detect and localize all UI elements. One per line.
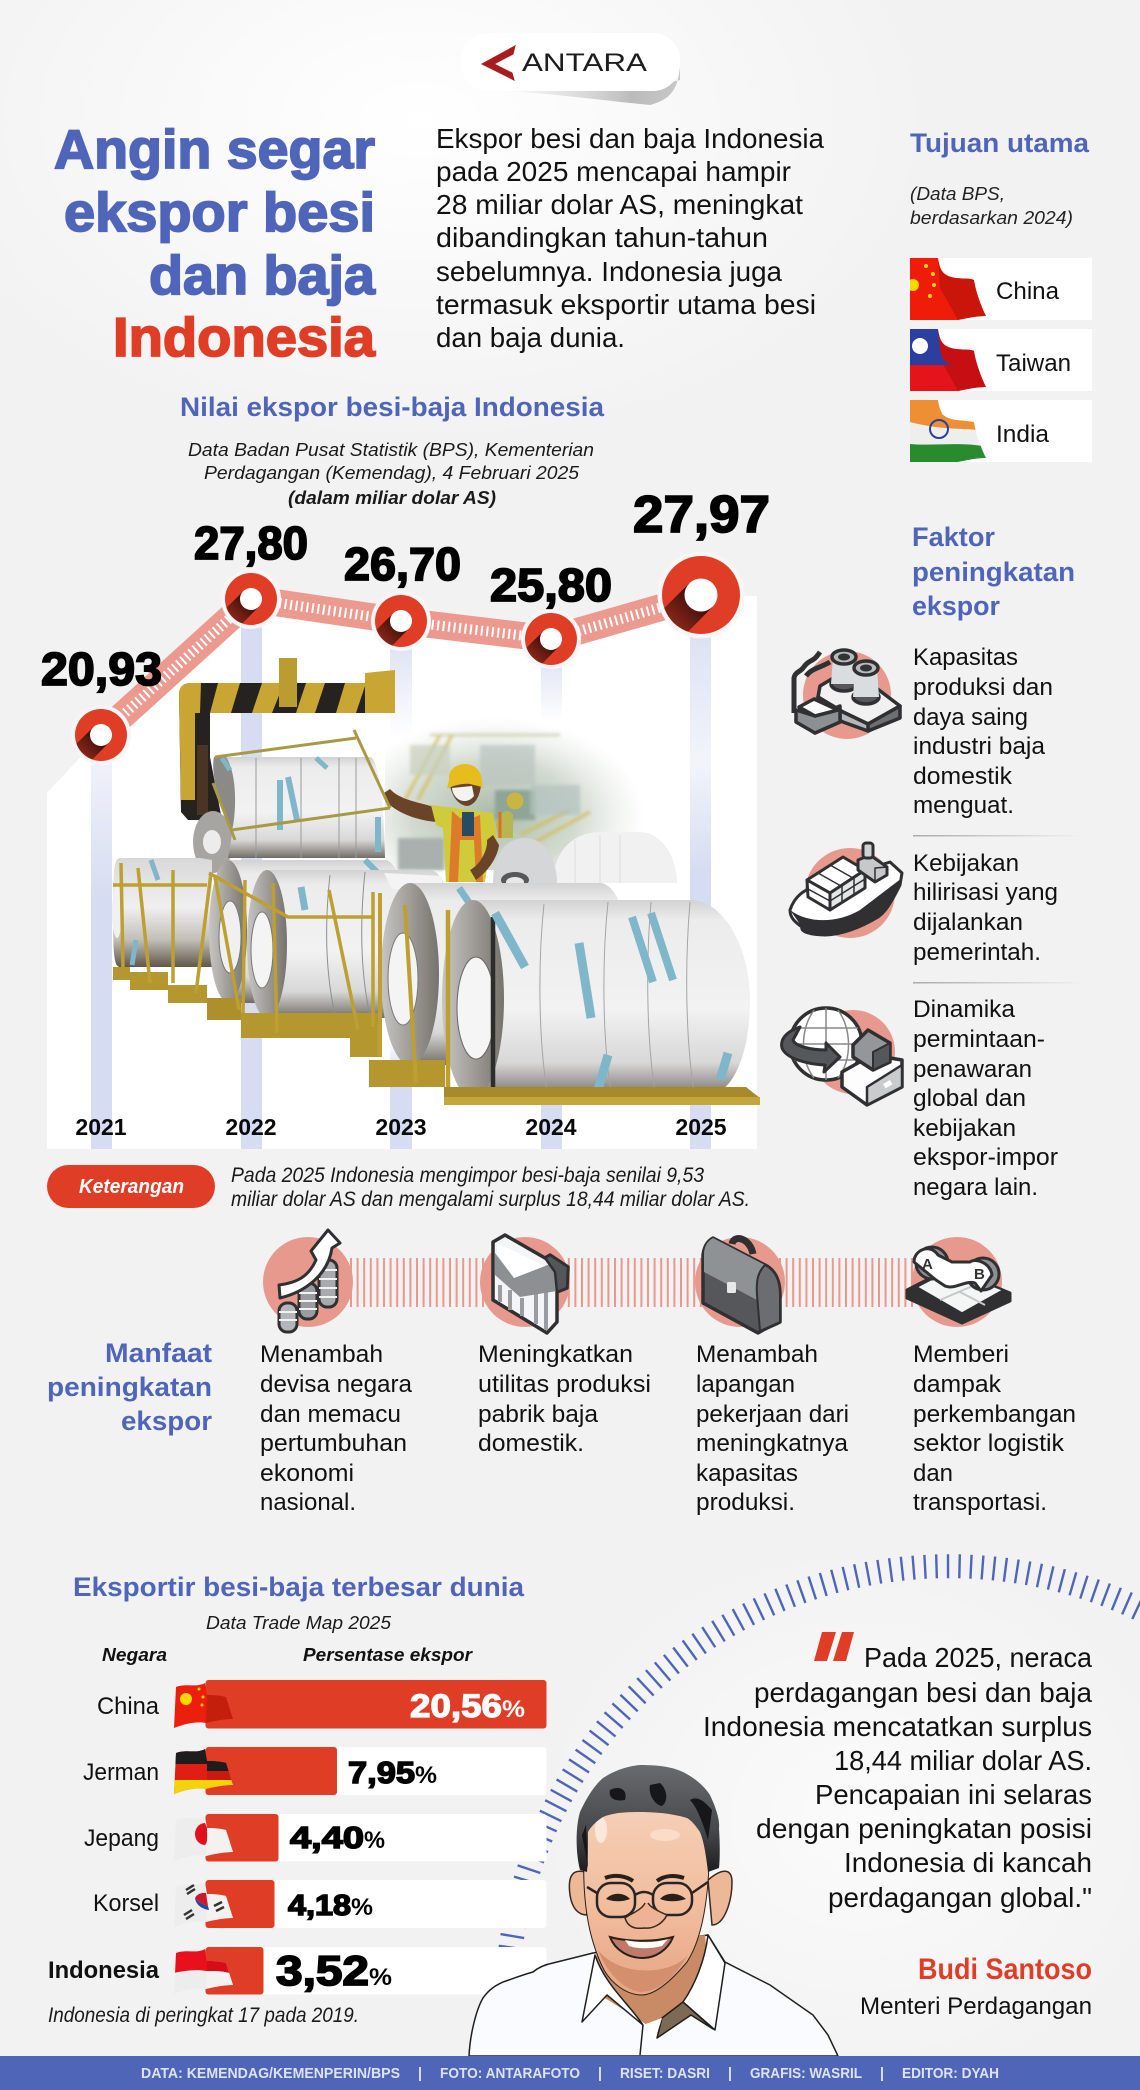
text: factor 3: global dan (913, 1085, 1026, 1112)
worker (384, 764, 499, 882)
quote text (703, 1642, 1093, 1913)
note: Keterangan: miliar dolar AS dan mengalami surplus 18,44 miliar dolar AS. (231, 1188, 750, 1211)
text: benefit 1: ekonomi (260, 1460, 354, 1487)
row: Indonesia: 3,52 (276, 1947, 369, 1994)
row: Korsel: Korsel (93, 1890, 159, 1917)
photo: steel coils and worker (112, 658, 760, 1105)
intro paragraph: dibandingkan tahun-tahun (436, 222, 768, 253)
text: factor 3: ekspor-impor (913, 1144, 1058, 1171)
text: benefit 4: perkembangan (913, 1401, 1076, 1428)
text: factor 1: industri baja (913, 733, 1046, 760)
factory background (385, 700, 645, 870)
connecting line (101, 596, 701, 735)
icon: coins and arrow (263, 1230, 353, 1332)
heading: Faktor peningkatan ekspor: peningkatan (912, 557, 1075, 587)
left coil (112, 858, 212, 1003)
text: benefit 4: transportasi. (913, 1489, 1047, 1516)
source note: Data Trade Map 2025 (206, 1613, 392, 1633)
point 2024 (521, 613, 581, 669)
source note: berdasarkan 2024) (910, 208, 1073, 228)
second coil (350, 883, 634, 1087)
data values (41, 486, 770, 695)
year labels: 2022 (225, 1114, 277, 1140)
text: factor 3 (913, 996, 1058, 1201)
intro paragraph: dan baja dunia. (436, 322, 625, 353)
row: Indonesia: Indonesia (48, 1957, 160, 1984)
lifter hook (179, 658, 395, 820)
row: Jepang: 4,40 (290, 1820, 364, 1855)
front coil (442, 900, 760, 1105)
heading: chart title: Nilai ekspor besi-baja Indonesia (180, 392, 605, 422)
data points (64, 552, 744, 772)
background coils (493, 832, 677, 888)
white chart background (47, 596, 757, 1149)
quote text: Pada 2025, neraca (864, 1642, 1093, 1673)
card: China: China (996, 278, 1060, 305)
heading: Faktor peningkatan ekspor: ekspor (912, 591, 1000, 621)
point 2025 (658, 556, 744, 638)
title: Indonesia (113, 306, 375, 368)
text: benefit 3: Menambah (696, 1341, 818, 1368)
quote text: dengan peningkatan posisi (756, 1813, 1092, 1844)
icon: map route: B (974, 1266, 985, 1283)
icon: map route: A (922, 1256, 933, 1273)
row: Korsel: % (351, 1894, 373, 1921)
row: Jerman: 7,95 (348, 1755, 415, 1790)
point 2021 (75, 707, 131, 763)
quote text: perdagangan global." (828, 1882, 1092, 1913)
footer credits: EDITOR: DYAH (902, 2065, 999, 2082)
text: benefit 3: lapangan (696, 1371, 795, 1398)
row: China: China (97, 1693, 160, 1720)
footer credits: | (598, 2065, 602, 2082)
speaker title: Menteri Perdagangan (860, 1993, 1092, 2020)
portrait: Budi Santoso (469, 1765, 838, 2056)
chart source note (188, 440, 594, 508)
text: factor 1: Kapasitas (913, 644, 1018, 671)
middle coil (209, 870, 455, 1038)
text: factor 1: domestik (913, 763, 1013, 790)
text: benefit 4 (913, 1341, 1076, 1516)
row: Jerman (83, 1747, 546, 1795)
text: factor 2: Kebijakan (913, 850, 1019, 877)
icon: factory utilization (480, 1235, 570, 1333)
text: benefit 3: kapasitas (696, 1460, 798, 1487)
data values: 26,70 (344, 538, 461, 590)
intro paragraph: Ekspor besi dan baja Indonesia (436, 123, 825, 154)
text: benefit 2: Meningkatkan (478, 1341, 633, 1368)
text: factor 3: penawaran (913, 1056, 1032, 1083)
row: Jepang (84, 1814, 546, 1862)
text: benefit 3: produksi. (696, 1489, 795, 1516)
data values: 27,97 (633, 486, 770, 544)
quote text: Indonesia mencatatkan surplus (703, 1711, 1092, 1742)
text: benefit 1: dan memacu (260, 1401, 401, 1428)
text: benefit 4: sektor logistik (913, 1430, 1065, 1457)
quote text: perdagangan besi dan baja (754, 1677, 1093, 1708)
text: benefit 1: Menambah (260, 1341, 383, 1368)
quote text: Pencapaian ini selaras (815, 1779, 1092, 1810)
footer credits: GRAFIS: WASRIL (750, 2065, 862, 2082)
icon: map route (907, 1237, 1010, 1327)
logo: ANTARA (461, 33, 680, 105)
glasses (587, 1882, 708, 1917)
text: benefit 1: devisa negara (260, 1371, 413, 1398)
footer credits (0, 2056, 1140, 2090)
heading: Manfaat peningkatan ekspor (47, 1338, 213, 1436)
panel: export benefits (47, 1230, 1076, 1516)
panel: main destinations (907, 128, 1092, 462)
intro paragraph: termasuk eksportir utama besi (436, 289, 816, 320)
row: Indonesia: % (369, 1964, 392, 1991)
title: dan baja (149, 244, 375, 306)
text: benefit 2: pabrik baja (478, 1401, 599, 1428)
face (584, 1808, 709, 1995)
text: factor 1: daya saing (913, 704, 1028, 731)
panel: world exporters bar chart (48, 1572, 546, 2027)
text: benefit 2: utilitas produksi (478, 1371, 651, 1398)
column headers (102, 1645, 473, 1665)
neck (596, 1935, 712, 2035)
text: factor 2 (913, 850, 1058, 966)
row: Jerman: Jerman (83, 1759, 159, 1786)
row: China (97, 1680, 546, 1729)
card: Taiwan (910, 329, 1092, 391)
data values: 20,93 (41, 643, 162, 695)
year labels: 2025 (675, 1114, 727, 1140)
quote (703, 1632, 1093, 2020)
year labels: 2024 (525, 1114, 577, 1140)
row: China: % (502, 1696, 525, 1723)
top coil (193, 730, 390, 873)
note: Keterangan: Keterangan (79, 1176, 184, 1198)
text: benefit 4: dampak (913, 1371, 1002, 1398)
card: India: India (996, 421, 1050, 448)
icon: globe and box (782, 1008, 902, 1105)
heading: Manfaat peningkatan ekspor: ekspor (121, 1406, 213, 1436)
background worker (496, 792, 524, 838)
text: benefit 2: domestik. (478, 1430, 584, 1457)
footer credits: | (418, 2065, 422, 2082)
rear middle coil (196, 860, 408, 1020)
icon: factory (794, 650, 900, 739)
row: Korsel: 4,18 (288, 1890, 351, 1922)
text: benefit 3: pekerjaan dari (696, 1401, 849, 1428)
heading: world exporters: Eksportir besi-baja terbesar dunia (73, 1572, 525, 1602)
eyebrows and eyes (605, 1876, 684, 1881)
text: factor 2: pemerintah. (913, 939, 1041, 966)
hair (577, 1765, 720, 1872)
intro paragraph: sebelumnya. Indonesia juga (436, 256, 783, 287)
column headers: Negara (102, 1645, 167, 1665)
source note (910, 184, 1073, 228)
title (54, 118, 375, 368)
text: benefit 4: dan (913, 1460, 953, 1487)
row: Korsel (93, 1880, 546, 1928)
chart source note: Data Badan Pusat Statistik (BPS), Kementerian (188, 440, 594, 460)
footnote: Indonesia di peringkat 17 pada 2019. (48, 2004, 359, 2027)
data values: 27,80 (194, 517, 308, 569)
decorative arc of ticks (509, 1566, 1140, 1960)
shirt (469, 1935, 838, 2056)
quote text: Indonesia di kancah (844, 1847, 1092, 1878)
speaker name: Budi Santoso (918, 1953, 1092, 1986)
row: Jerman: % (415, 1762, 437, 1789)
source note: (Data BPS, (910, 184, 1005, 204)
heading: Faktor peningkatan ekspor: Faktor (912, 522, 995, 552)
card: China (907, 258, 1092, 320)
point 2022 (222, 573, 281, 629)
row: Jepang: % (364, 1827, 385, 1854)
heading: Faktor peningkatan ekspor (912, 522, 1075, 621)
year bars (91, 596, 711, 1149)
title: Angin segar (54, 118, 375, 180)
footer credits: DATA: KEMENDAG/KEMENPERIN/BPS (141, 2065, 400, 2082)
year labels: 2023 (375, 1114, 427, 1140)
row: China: 20,56 (410, 1688, 502, 1724)
note: Keterangan: Pada 2025 Indonesia mengimpor besi-baja senilai 9,53 (231, 1164, 704, 1187)
heading: Manfaat peningkatan ekspor: Manfaat (105, 1338, 212, 1368)
text: benefit 3 (696, 1341, 849, 1516)
quote mark (814, 1632, 854, 1661)
title: ekspor besi (64, 181, 375, 243)
column headers: Persentase ekspor (303, 1645, 473, 1665)
intro paragraph (436, 123, 825, 353)
text: factor 3: permintaan- (913, 1026, 1045, 1053)
panel: export factors (782, 522, 1085, 1201)
text: factor 3: Dinamika (913, 996, 1016, 1023)
text: benefit 1 (260, 1341, 413, 1516)
text: factor 2: dijalankan (913, 909, 1023, 936)
text: benefit 3: meningkatnya (696, 1430, 849, 1457)
footer credits: RISET: DASRI (620, 2065, 710, 2082)
heading: Manfaat peningkatan ekspor: peningkatan (47, 1372, 212, 1402)
card: Taiwan: Taiwan (996, 350, 1071, 377)
ears (569, 1871, 732, 1925)
footer credits: | (728, 2065, 732, 2082)
text: factor 1: produksi dan (913, 674, 1053, 701)
footer credits: | (880, 2065, 884, 2082)
row: Jepang: Jepang (84, 1825, 159, 1852)
collar (582, 1935, 725, 2055)
icon: briefcase (695, 1237, 785, 1333)
text: benefit 4: Memberi (913, 1341, 1009, 1368)
intro paragraph: pada 2025 mencapai hampir (436, 156, 791, 187)
chart source note: Perdagangan (Kemendag), 4 Februari 2025 (204, 463, 580, 483)
line chart panel with photo (41, 486, 770, 1149)
point 2023 (371, 595, 431, 651)
text: factor 1: menguat. (913, 792, 1014, 819)
icon: cargo ship (790, 843, 902, 938)
intro paragraph: 28 miliar dolar AS, meningkat (436, 189, 803, 220)
logo: ANTARA: ANTARA (522, 49, 647, 77)
text: factor 3: kebijakan (913, 1115, 1016, 1142)
note: Keterangan (47, 1164, 750, 1211)
text: factor 1 (913, 644, 1053, 819)
text: benefit 1: pertumbuhan (260, 1430, 407, 1457)
text: benefit 1: nasional. (260, 1489, 356, 1516)
footer credits: FOTO: ANTARAFOTO (440, 2065, 580, 2082)
data values: 25,80 (490, 559, 612, 611)
year labels (75, 1114, 727, 1140)
quote text: 18,44 miliar dolar AS. (834, 1745, 1092, 1776)
text: benefit 2 (478, 1341, 651, 1457)
text: factor 3: negara lain. (913, 1174, 1038, 1201)
row: Indonesia (48, 1947, 546, 1995)
chart source note: (dalam miliar dolar AS) (288, 488, 496, 508)
hatched connector (350, 1258, 915, 1307)
year labels: 2021 (75, 1114, 127, 1140)
text: factor 2: hilirisasi yang (913, 879, 1058, 906)
card: India (910, 400, 1092, 462)
heading: Tujuan utama: Tujuan utama (910, 128, 1090, 158)
nose and smile (625, 1903, 667, 1928)
